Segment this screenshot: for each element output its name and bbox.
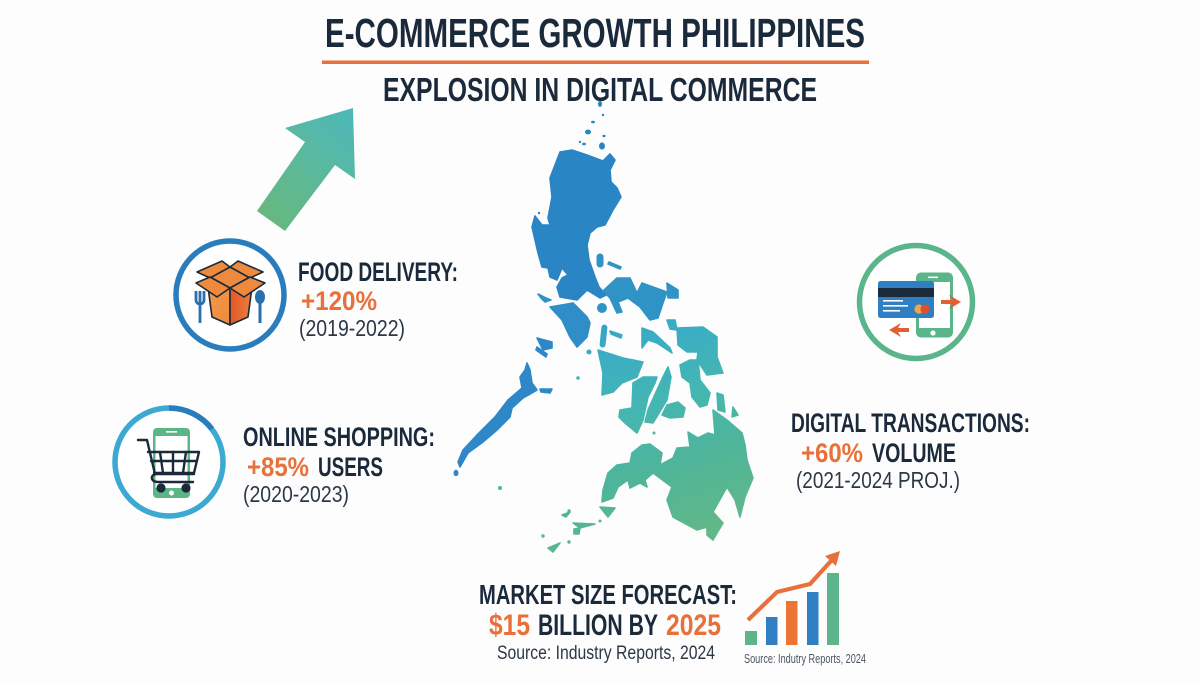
food delivery icon [176, 241, 284, 349]
northern islets [538, 101, 606, 214]
arrow right [941, 295, 961, 309]
market size forecast text: Source: Industry Reports, 2024 [497, 643, 715, 664]
trend arrow [748, 551, 840, 620]
map of the Philippines [454, 101, 753, 552]
subtitle: EXPLOSION IN DIGITAL COMMERCE [383, 71, 817, 108]
shopping cart [138, 440, 199, 491]
chart source note: Source: Indutry Reports, 2024 [744, 652, 866, 666]
online shopping icon [115, 408, 223, 516]
arrow left [889, 323, 909, 337]
online shopping text: ONLINE SHOPPING: [243, 422, 435, 452]
market size forecast text [479, 579, 737, 664]
online shopping text: USERS [318, 452, 383, 482]
Bicol and nearby islands [538, 254, 678, 320]
growth arrow [257, 108, 355, 231]
spoon [255, 290, 265, 323]
online shopping text [243, 422, 435, 507]
food delivery text: +120% [301, 286, 377, 316]
digital transactions text: DIGITAL TRANSACTIONS: [791, 408, 1030, 438]
market growth bar chart [745, 551, 840, 645]
fork [196, 291, 204, 323]
digital transactions text [791, 408, 1030, 493]
digital transactions text: VOLUME [872, 438, 956, 468]
market size forecast text: $15 [489, 609, 530, 642]
food delivery text [298, 257, 458, 341]
phone [917, 274, 952, 337]
Mindoro [550, 303, 590, 347]
digital transactions text: (2021-2024 PROJ.) [796, 467, 960, 493]
phone [153, 428, 190, 498]
Visayas and Mindanao [498, 320, 753, 552]
digital transactions text: +60% [801, 438, 863, 468]
food delivery text: FOOD DELIVERY: [298, 257, 458, 287]
Luzon [532, 150, 621, 300]
digital transactions icon [860, 246, 972, 358]
market size forecast text: 2025 [666, 609, 721, 642]
online shopping text: (2020-2023) [243, 481, 349, 507]
Palawan group [454, 338, 552, 476]
online shopping text: +85% [247, 452, 309, 482]
title underline [322, 60, 869, 64]
market size forecast text: BILLION BY [538, 609, 658, 642]
open box [196, 261, 265, 325]
title: E-COMMERCE GROWTH PHILIPPINES [325, 10, 865, 56]
food delivery text: (2019-2022) [299, 315, 405, 341]
credit card [878, 281, 934, 318]
market size forecast text: MARKET SIZE FORECAST: [479, 579, 737, 610]
